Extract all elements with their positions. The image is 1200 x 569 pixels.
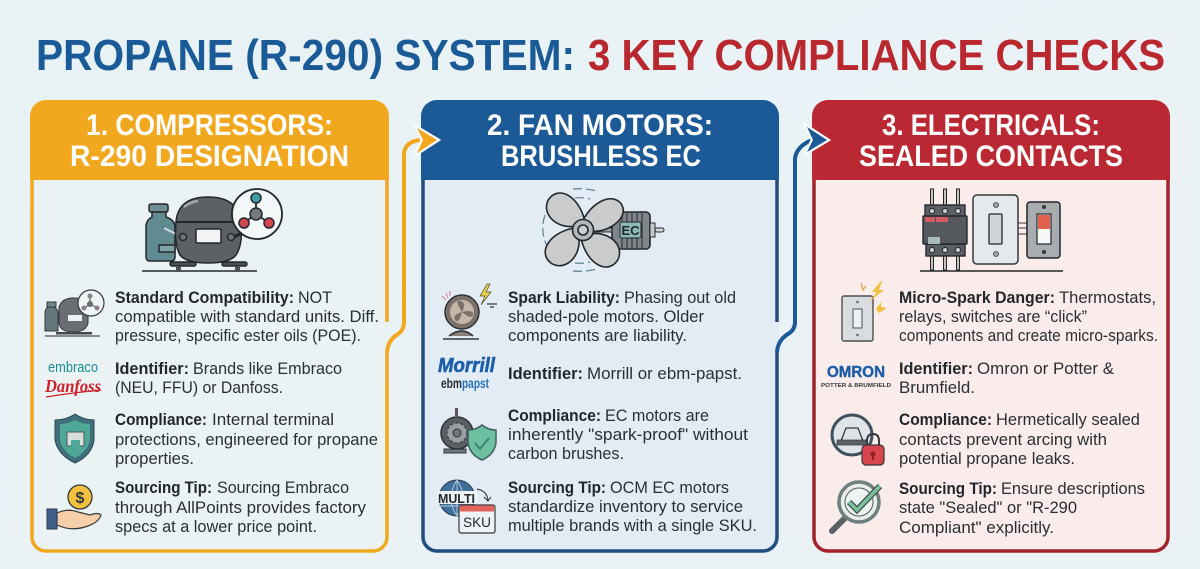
text: identifier: Identifier: [115, 360, 189, 378]
text: identifier: Brands like Embraco [193, 360, 342, 378]
text: standard compatibility: pressure, specific ester oils (POE). [115, 327, 361, 345]
icon: switch with sparks [842, 281, 887, 341]
text: micro-spark danger: Thermostats, [1059, 289, 1156, 307]
icon: sealed contact with lock [832, 415, 884, 465]
icon: magnifier with check [832, 482, 880, 531]
text: spark liability [508, 289, 736, 345]
arrow: panel 1 to panel 2 [387, 128, 437, 352]
text: sourcing tip [508, 479, 757, 535]
logos: morrill and ebm-papst: Morrill [438, 355, 495, 377]
panel: compressors [30, 100, 389, 553]
text: compliance [508, 407, 748, 463]
text: compliance: Internal terminal [212, 411, 334, 429]
text: standard compatibility: NOT [298, 289, 332, 307]
text: sourcing tip: through AllPoints provides factory [115, 499, 367, 517]
text: micro-spark danger: relays, switches are “click” [899, 308, 1087, 326]
text: compliance: properties. [115, 450, 194, 468]
text: identifier: Morrill or ebm-papst. [587, 365, 742, 383]
text: compliance [899, 411, 1140, 468]
panel header: compressors [30, 100, 389, 180]
logos: embraco and danfoss [44, 359, 101, 397]
icon: multi SKU [437, 480, 495, 533]
text: compliance: Compliance: [115, 411, 207, 429]
text: standard compatibility: Standard Compatibility: [115, 289, 294, 307]
logos: morrill and ebm-papst: papst [462, 375, 489, 391]
text: sourcing tip: specs at a lower price point. [115, 518, 317, 536]
icon: small compressor [45, 290, 104, 336]
icon: hand with coin: $ [76, 490, 85, 507]
text: sourcing tip: OCM EC motors [610, 479, 729, 497]
logos: morrill and ebm-papst: ebm [441, 375, 462, 391]
text: sourcing tip: Sourcing Tip: [115, 479, 212, 497]
icon: breaker and switches [920, 189, 1063, 271]
arrow: panel 2 to panel 3 [777, 127, 827, 352]
panel header: fan motors [421, 100, 779, 180]
icon: fan and EC motor [539, 187, 664, 273]
text: compliance: carbon brushes. [508, 445, 624, 463]
text: identifier: Identifier: [899, 360, 973, 378]
text: compliance [115, 411, 378, 468]
logos: omron and potter & brumfield: POTTER & BRUMFIELD [821, 383, 891, 389]
text: identifier: (NEU, FFU) or Danfoss. [115, 379, 283, 397]
text: identifier: Omron or Potter & [977, 360, 1114, 378]
text: identifier: Identifier: [508, 365, 583, 383]
icon: fan and EC motor: EC [621, 223, 640, 238]
icon: spark liability motor [442, 284, 497, 339]
text: sourcing tip: Ensure descriptions [1001, 480, 1145, 498]
text: sourcing tip [115, 479, 367, 536]
text: compliance: EC motors are [605, 407, 709, 425]
text: sourcing tip: Compliant" explicitly. [899, 519, 1054, 537]
text: spark liability: Phasing out old [624, 289, 736, 307]
text: standard compatibility [115, 289, 379, 345]
text: compliance: inherently "spark-proof" without [508, 426, 748, 444]
logos: omron and potter & brumfield [821, 364, 891, 389]
text: sourcing tip [899, 480, 1145, 537]
text: micro-spark danger: Micro-Spark Danger: [899, 289, 1055, 307]
title: PROPANE (R-290) SYSTEM: [36, 31, 575, 80]
text: standard compatibility: compatible with standard units. Diff. [115, 308, 379, 326]
panel header: electricals: 3. ELECTRICALS: [882, 109, 1100, 142]
text: identifier: Brumfield. [899, 379, 975, 397]
text: compliance: Compliance: [508, 407, 601, 425]
icon: multi SKU: MULTI [438, 492, 475, 506]
panel: electricals [812, 100, 1170, 553]
text: micro-spark danger: components and create micro-sparks. [899, 327, 1158, 345]
icon: motor with shield [441, 408, 496, 460]
panel: fan motors [421, 100, 779, 553]
panel header: fan motors: BRUSHLESS EC [501, 140, 701, 173]
icon: multi SKU: SKU [463, 514, 491, 530]
title [36, 31, 1165, 80]
text: identifier [899, 360, 1114, 397]
icon: compressor with molecule [142, 189, 282, 271]
logos: omron and potter & brumfield: OMRON [827, 364, 885, 381]
text: sourcing tip: state "Sealed" or "R-290 [899, 499, 1077, 517]
icon: hand with coin [47, 485, 101, 529]
logos: embraco and danfoss: embraco [48, 359, 98, 376]
panel header: electricals: SEALED CONTACTS [859, 140, 1123, 173]
text: compliance: Hermetically sealed [996, 411, 1140, 429]
panel header: compressors: R-290 DESIGNATION [70, 140, 349, 173]
icon: shield [55, 414, 94, 463]
panel header: compressors: 1. COMPRESSORS: [86, 109, 333, 142]
text: compliance: Compliance: [899, 411, 992, 429]
text: sourcing tip: Sourcing Tip: [899, 480, 997, 498]
panel header: electricals [812, 100, 1170, 180]
text: compliance: potential propane leaks. [899, 450, 1075, 468]
text: sourcing tip: multiple brands with a single SKU. [508, 517, 757, 535]
text: sourcing tip: Sourcing Tip: [508, 479, 606, 497]
text: compliance: protections, engineered for propane [115, 431, 378, 449]
logos: morrill and ebm-papst [438, 355, 495, 391]
text: micro-spark danger [899, 289, 1158, 345]
text: compliance: contacts prevent arcing with [899, 431, 1107, 449]
text: spark liability: shaded-pole motors. Older [508, 308, 704, 326]
text: spark liability: components are liability. [508, 327, 687, 345]
text: identifier [115, 360, 342, 397]
logos: embraco and danfoss: Danfoss [44, 376, 101, 396]
text: identifier [508, 365, 742, 383]
text: sourcing tip: standardize inventory to service [508, 498, 743, 516]
text: spark liability: Spark Liability: [508, 289, 620, 307]
text: sourcing tip: Sourcing Embraco [217, 479, 349, 497]
panel header: fan motors: 2. FAN MOTORS: [487, 109, 713, 142]
